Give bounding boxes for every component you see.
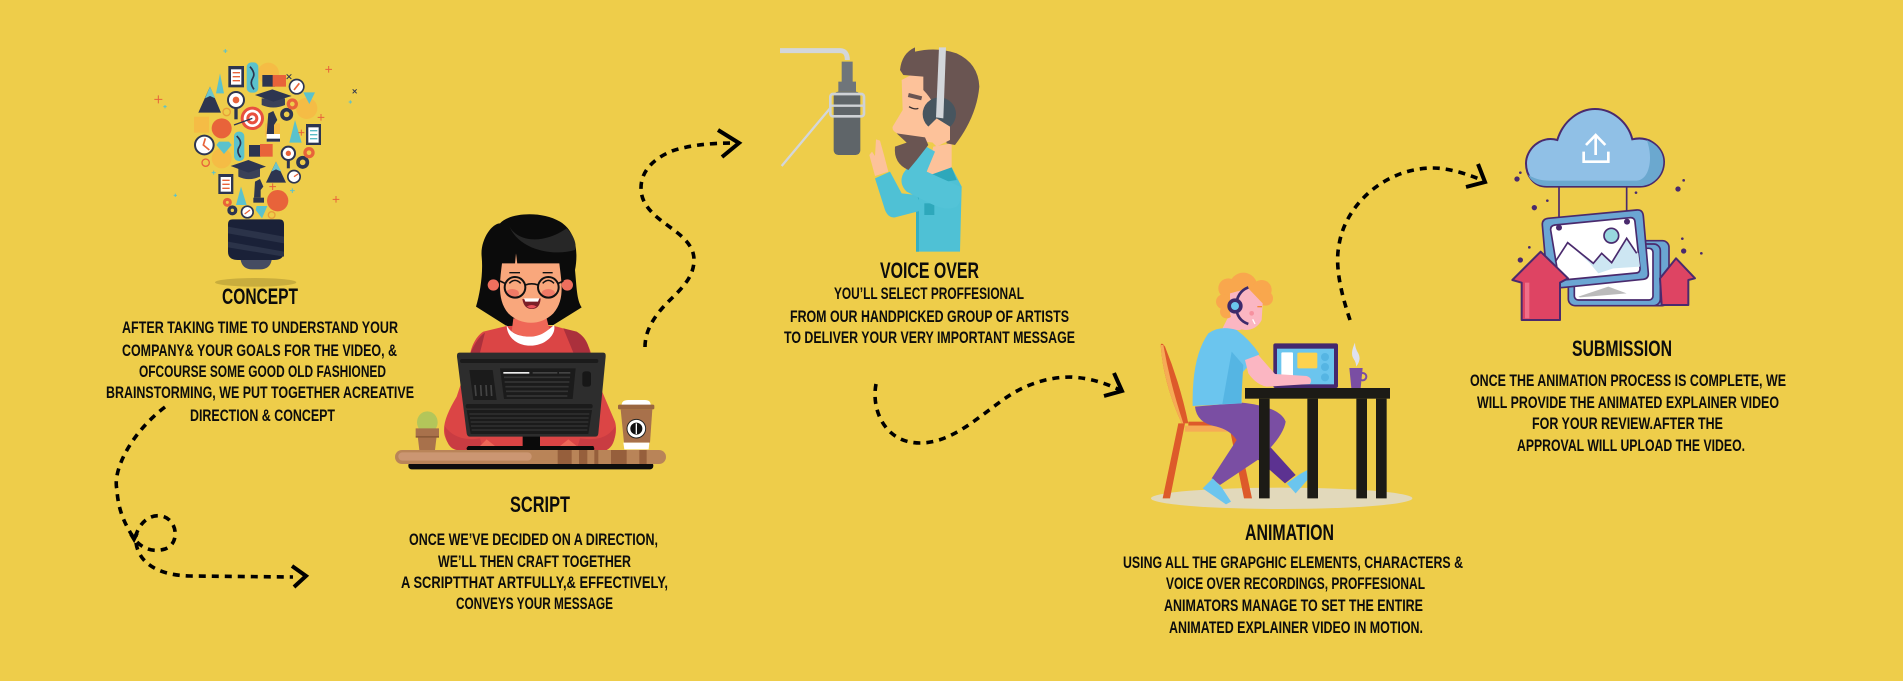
script description: ONCE WE’VE DECIDED ON A DIRECTION, — [409, 531, 658, 549]
heading: script: SCRIPT — [510, 492, 570, 517]
animation description — [1123, 554, 1463, 637]
heading: submission: SUBMISSION — [1572, 336, 1672, 361]
face — [488, 279, 499, 291]
concept description: BRAINSTORMING, WE PUT TOGETHER ACREATIVE — [106, 384, 414, 402]
chair — [1163, 423, 1252, 498]
red arrows — [1512, 252, 1568, 320]
arrow: script to voice over — [641, 130, 739, 347]
laptop — [1273, 343, 1338, 388]
concept description — [106, 319, 414, 425]
heading: animation: ANIMATION — [1245, 520, 1334, 545]
submission description: APPROVAL WILL UPLOAD THE VIDEO. — [1517, 437, 1745, 455]
voice over description: TO DELIVER YOUR VERY IMPORTANT MESSAGE — [784, 329, 1075, 347]
concept description: COMPANY& YOUR GOALS FOR THE VIDEO, & — [122, 342, 397, 360]
cactus — [417, 411, 438, 433]
arrow: concept to script — [116, 407, 306, 587]
voice over description: YOU’LL SELECT PROFFESIONAL — [834, 285, 1024, 303]
head — [893, 63, 942, 143]
concept description: DIRECTION & CONCEPT — [190, 407, 335, 425]
torso — [926, 143, 952, 177]
illustration: girl at computer — [395, 214, 666, 469]
heading: voice over: VOICE OVER — [880, 258, 979, 283]
panel: submission text — [1470, 336, 1786, 455]
microphone — [780, 51, 847, 60]
animation description: USING ALL THE GRAPGHIC ELEMENTS, CHARACTERS & — [1123, 554, 1463, 572]
script description: A SCRIPTTHAT ARTFULLY,& EFFECTIVELY, — [401, 574, 668, 592]
illustration: cloud upload with pictures — [1512, 109, 1703, 320]
animation description: ANIMATORS MANAGE TO SET THE ENTIRE — [1164, 597, 1423, 615]
animation description: VOICE OVER RECORDINGS, PROFFESIONAL — [1166, 575, 1425, 593]
illustration: voice over man at microphone — [780, 47, 979, 252]
front picture frame — [1542, 210, 1648, 288]
hair — [476, 214, 582, 326]
submission description: ONCE THE ANIMATION PROCESS IS COMPLETE, WE — [1470, 372, 1786, 390]
heading: concept: CONCEPT — [222, 284, 298, 309]
illustration: concept light bulb — [154, 49, 357, 287]
animator figure — [1230, 430, 1296, 483]
back picture frames — [1578, 241, 1669, 306]
illustration: animator at desk — [1151, 273, 1412, 509]
upload icon — [1584, 135, 1608, 162]
animation description: ANIMATED EXPLAINER VIDEO IN MOTION. — [1169, 619, 1423, 637]
voice over description: FROM OUR HANDPICKED GROUP OF ARTISTS — [790, 308, 1069, 326]
concept description: AFTER TAKING TIME TO UNDERSTAND YOUR — [122, 319, 398, 337]
table — [1245, 388, 1390, 399]
script description — [401, 531, 668, 613]
concept description: OFCOURSE SOME GOOD OLD FASHIONED — [139, 363, 386, 381]
voice over description — [784, 285, 1075, 347]
cloud — [1526, 109, 1664, 187]
monitor — [467, 436, 594, 450]
desk — [408, 462, 653, 469]
submission description: WILL PROVIDE THE ANIMATED EXPLAINER VIDEO — [1477, 394, 1779, 412]
dots — [1514, 171, 1703, 263]
script description: CONVEYS YOUR MESSAGE — [456, 595, 613, 613]
panel: animation text — [1123, 520, 1463, 637]
strings — [1559, 187, 1627, 228]
panel: voice over text — [784, 258, 1075, 347]
arrow: voice over to animation — [875, 373, 1122, 443]
sweater — [444, 326, 616, 450]
arrow: animation to submission — [1338, 164, 1485, 320]
submission description: FOR YOUR REVIEW.AFTER THE — [1532, 415, 1723, 433]
script description: WE’LL THEN CRAFT TOGETHER — [438, 553, 631, 571]
submission description — [1470, 372, 1786, 455]
panel: concept text — [106, 284, 414, 425]
mug — [1359, 373, 1366, 380]
coffee cup — [622, 400, 651, 405]
panel: script text — [401, 492, 668, 613]
